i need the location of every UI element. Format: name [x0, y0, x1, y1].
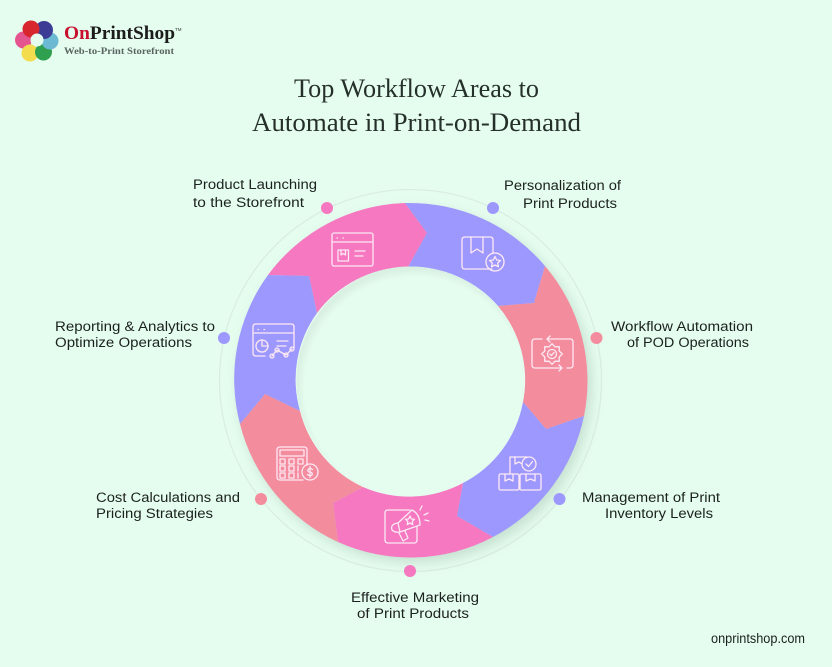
- label: reporting: Optimize Operations: [55, 335, 192, 350]
- icon: storefront window: [332, 233, 373, 266]
- label: personalization: Print Products: [523, 196, 617, 211]
- label: workflow automation: of POD Operations: [627, 335, 749, 350]
- label: product launching: [193, 177, 317, 210]
- label: inventory: [582, 490, 720, 521]
- segment: reporting: [234, 275, 317, 424]
- label: inventory: Inventory Levels: [605, 506, 713, 521]
- title: [252, 74, 581, 137]
- label: cost calculations: Cost Calculations and: [96, 490, 240, 505]
- label: personalization: [504, 178, 621, 211]
- website url: onprintshop.com: [711, 631, 805, 646]
- label: product launching: Product Launching: [193, 177, 317, 192]
- ring shadow: [238, 209, 592, 563]
- ring hole: [296, 266, 524, 494]
- icon: stacked boxes with check: [499, 457, 541, 490]
- dot: personalization: [487, 202, 499, 214]
- dot: inventory: [554, 493, 566, 505]
- shadow mask behind the ring hole: [290, 260, 530, 500]
- logo trademark: TM: [175, 27, 182, 32]
- label: workflow automation: [611, 319, 753, 350]
- outer thin ring: [220, 190, 602, 572]
- dot: workflow automation: [590, 332, 602, 344]
- dot: reporting: [218, 332, 230, 344]
- segment: product launching: [268, 203, 427, 313]
- segment: personalization: [405, 203, 545, 306]
- dot: cost calculations: [255, 493, 267, 505]
- title: Top Workflow Areas to: [294, 74, 539, 103]
- label: inventory: Management of Print: [582, 490, 720, 505]
- label: cost calculations: Pricing Strategies: [96, 506, 213, 521]
- logo tagline: Web-to-Print Storefront: [64, 47, 175, 57]
- icon: gear with process arrows: [532, 336, 573, 371]
- title: Automate in Print-on-Demand: [252, 108, 581, 137]
- logo: [15, 20, 182, 62]
- label: workflow automation: Workflow Automation: [611, 319, 753, 334]
- icon: megaphone: [385, 506, 429, 543]
- workflow ring: [234, 203, 587, 557]
- label: product launching: to the Storefront: [193, 195, 304, 210]
- label: reporting: [55, 319, 215, 350]
- segment: inventory: [457, 402, 584, 537]
- icon: calculator with dollar: [277, 447, 318, 480]
- label: marketing: of Print Products: [357, 606, 469, 621]
- label: reporting: Reporting & Analytics to: [55, 319, 215, 334]
- label: marketing: Effective Marketing: [351, 590, 479, 605]
- icon: analytics window: [253, 324, 294, 358]
- icon: box with star badge: [462, 237, 504, 271]
- dot: product launching: [321, 202, 333, 214]
- ring hole soft shadow: [296, 266, 524, 494]
- label: marketing: [351, 590, 479, 621]
- segment: cost calculations: [240, 394, 363, 542]
- logo wordmark: OnPrintShop: [64, 23, 175, 44]
- label: cost calculations: [96, 490, 240, 521]
- logo icon: colored petals: [15, 20, 58, 62]
- label: personalization: Personalization of: [504, 178, 621, 193]
- dot: marketing: [404, 565, 416, 577]
- segment: workflow automation: [498, 266, 587, 429]
- segment: marketing: [333, 483, 493, 557]
